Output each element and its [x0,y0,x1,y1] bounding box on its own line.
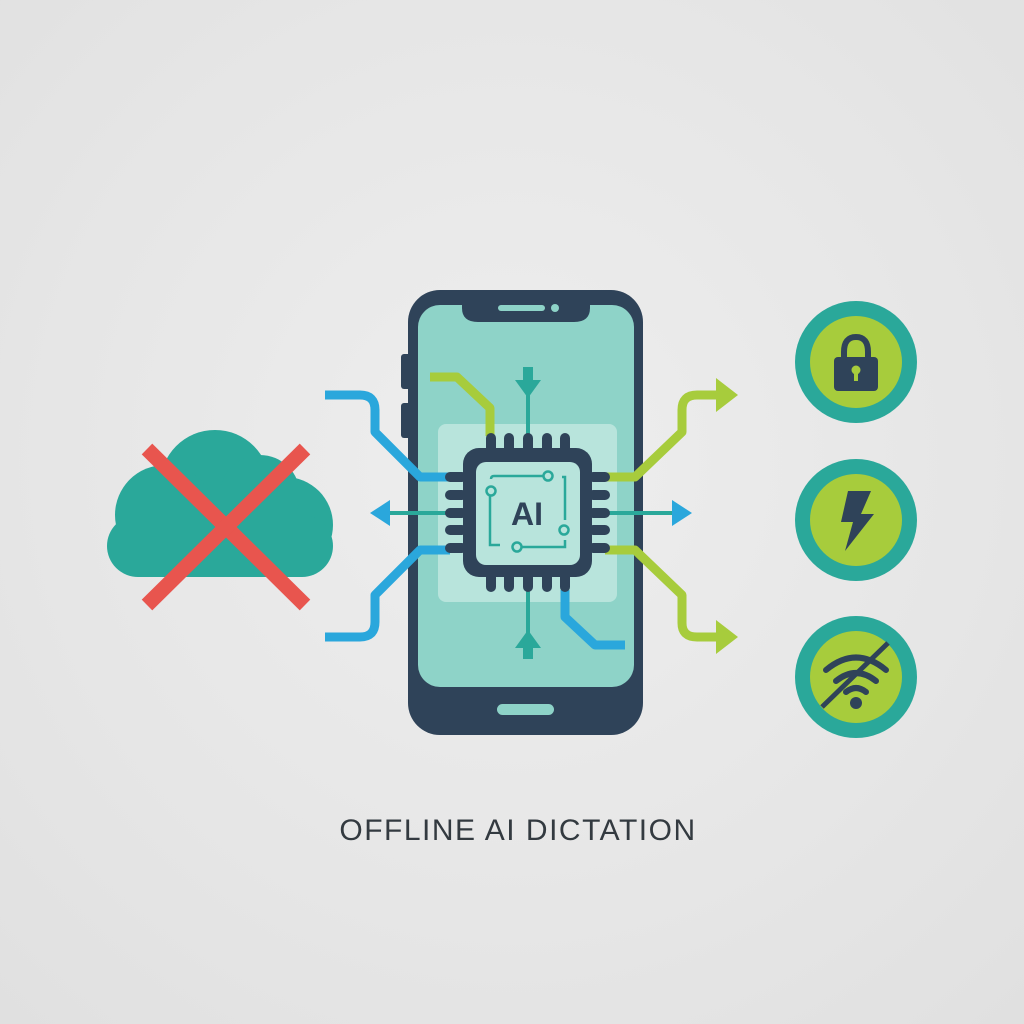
arrowheads [370,367,738,659]
icon: lightning badge [795,459,917,581]
chip [445,433,610,592]
icon: no wifi badge [795,616,917,738]
icon: cloud crossed out [107,430,333,605]
phone [401,290,643,735]
chip label: AI [511,496,543,532]
connector lines [325,377,720,645]
icon: lock badge [795,301,917,423]
title: OFFLINE AI DICTATION [339,814,697,847]
